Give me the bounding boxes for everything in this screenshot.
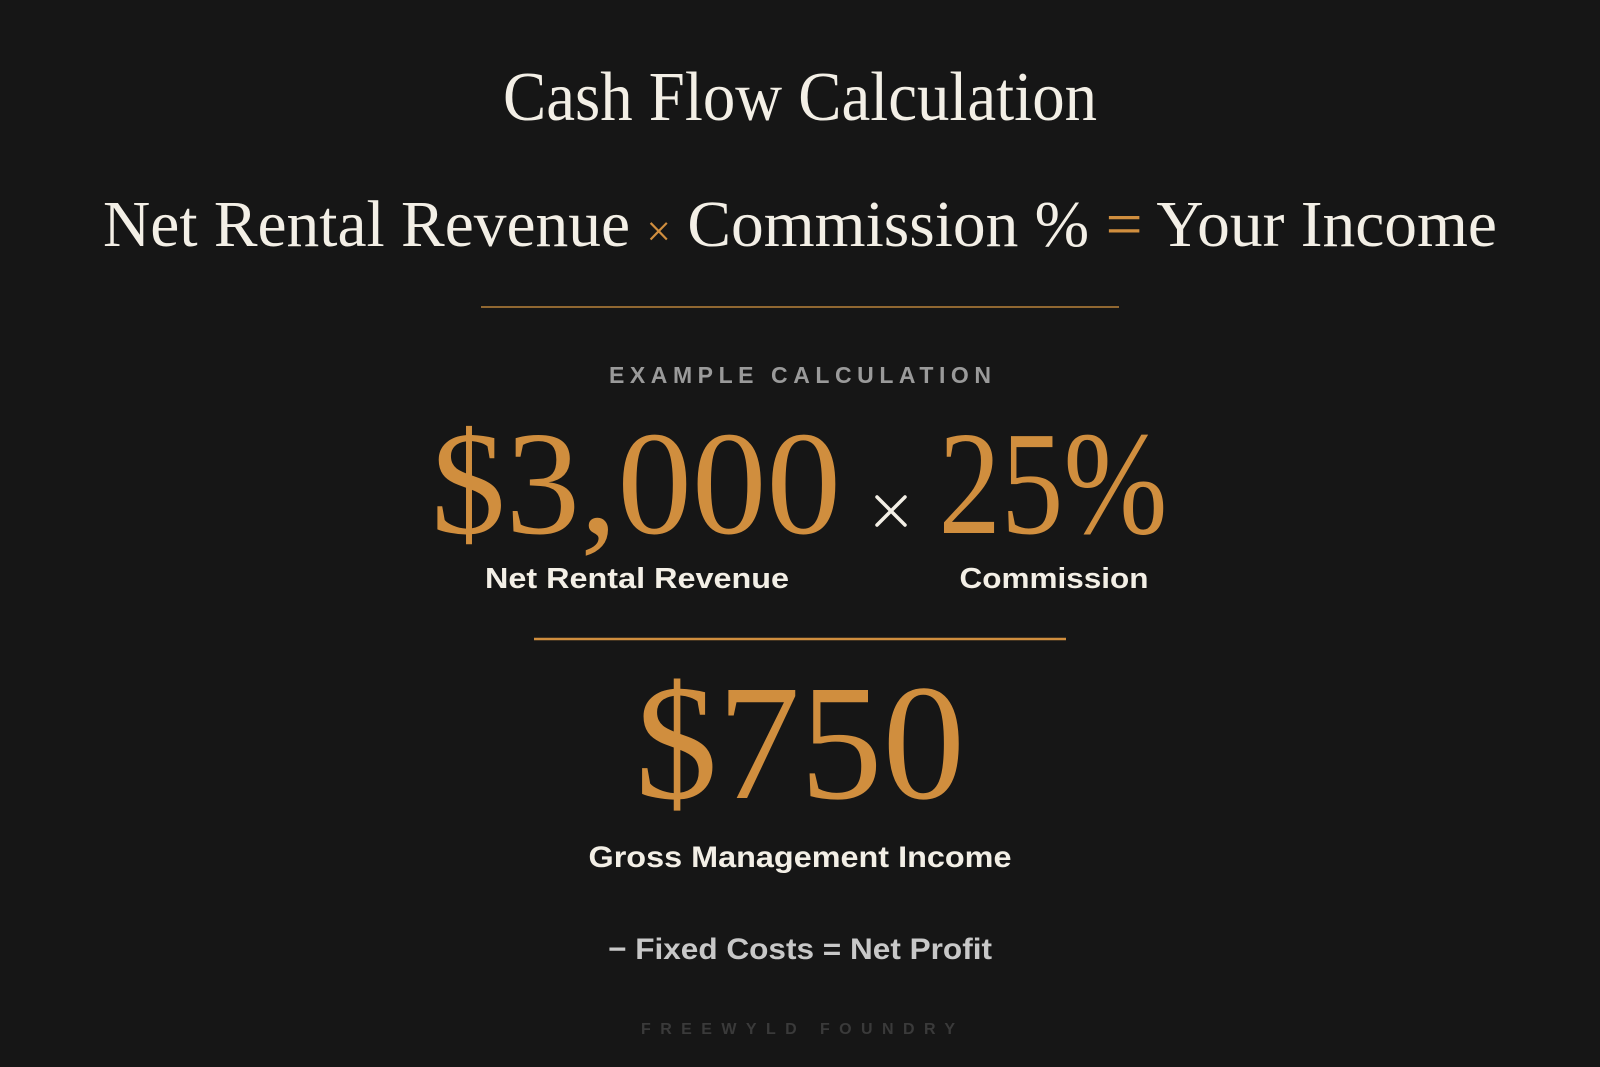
section label: example calculation: EXAMPLE CALCULATION	[609, 362, 991, 388]
multiply sign	[877, 497, 905, 525]
result: gross management income: $750	[635, 651, 965, 834]
note: fixed costs: − Fixed Costs = Net Profit	[608, 933, 992, 966]
result: gross management income	[588, 651, 1012, 874]
value: net rental revenue: $3,000	[431, 402, 841, 566]
formula line: Net Rental Revenue × Commission % = Your Income	[103, 188, 1497, 261]
title: Cash Flow Calculation	[503, 59, 1097, 136]
result: gross management income: Gross Management Income	[588, 841, 1012, 874]
value: commission: 25%	[938, 402, 1168, 566]
value: net rental revenue: Net Rental Revenue	[485, 563, 789, 595]
value: commission: Commission	[960, 563, 1148, 595]
footer brand: FREEWYLD FOUNDRY	[641, 1021, 955, 1038]
